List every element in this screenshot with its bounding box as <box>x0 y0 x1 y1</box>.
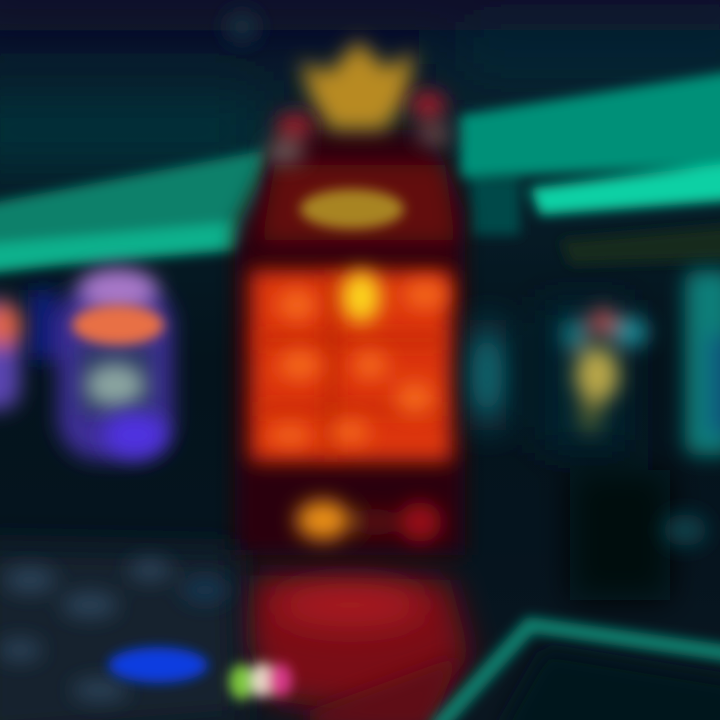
machine body <box>235 130 465 555</box>
blue button <box>108 647 208 683</box>
floor neon line <box>435 625 720 720</box>
ceiling light spot <box>226 11 258 43</box>
far right panel <box>685 270 720 455</box>
left machine orange panel <box>72 305 164 345</box>
multicolor button <box>229 662 292 700</box>
left green neon band <box>0 150 265 275</box>
screen <box>250 270 452 462</box>
ceiling glow <box>0 0 720 160</box>
floor right <box>505 650 720 720</box>
deck buttons <box>0 559 229 701</box>
left machine violet glow <box>103 413 167 457</box>
deck base <box>0 545 240 720</box>
screen warm spots <box>268 281 447 445</box>
small teal spot <box>663 514 707 546</box>
colored ornament <box>562 308 648 433</box>
teal side glow <box>472 339 502 411</box>
base deck <box>245 575 470 720</box>
right machines <box>470 270 720 600</box>
screen dark grid <box>255 275 445 455</box>
right machine body <box>470 300 670 600</box>
right green neon band <box>460 70 720 265</box>
crown <box>300 40 415 130</box>
gold marquee <box>300 189 404 229</box>
central slot machine <box>235 40 470 720</box>
left machine dome <box>78 268 158 312</box>
far left machine <box>0 300 22 410</box>
left control deck <box>0 545 292 720</box>
left machine body <box>28 285 173 460</box>
red side ornaments <box>265 91 452 164</box>
left slot machine <box>28 268 173 460</box>
lower panel buttons <box>296 500 442 542</box>
screen highlight <box>341 271 381 323</box>
left machine center <box>85 363 145 407</box>
